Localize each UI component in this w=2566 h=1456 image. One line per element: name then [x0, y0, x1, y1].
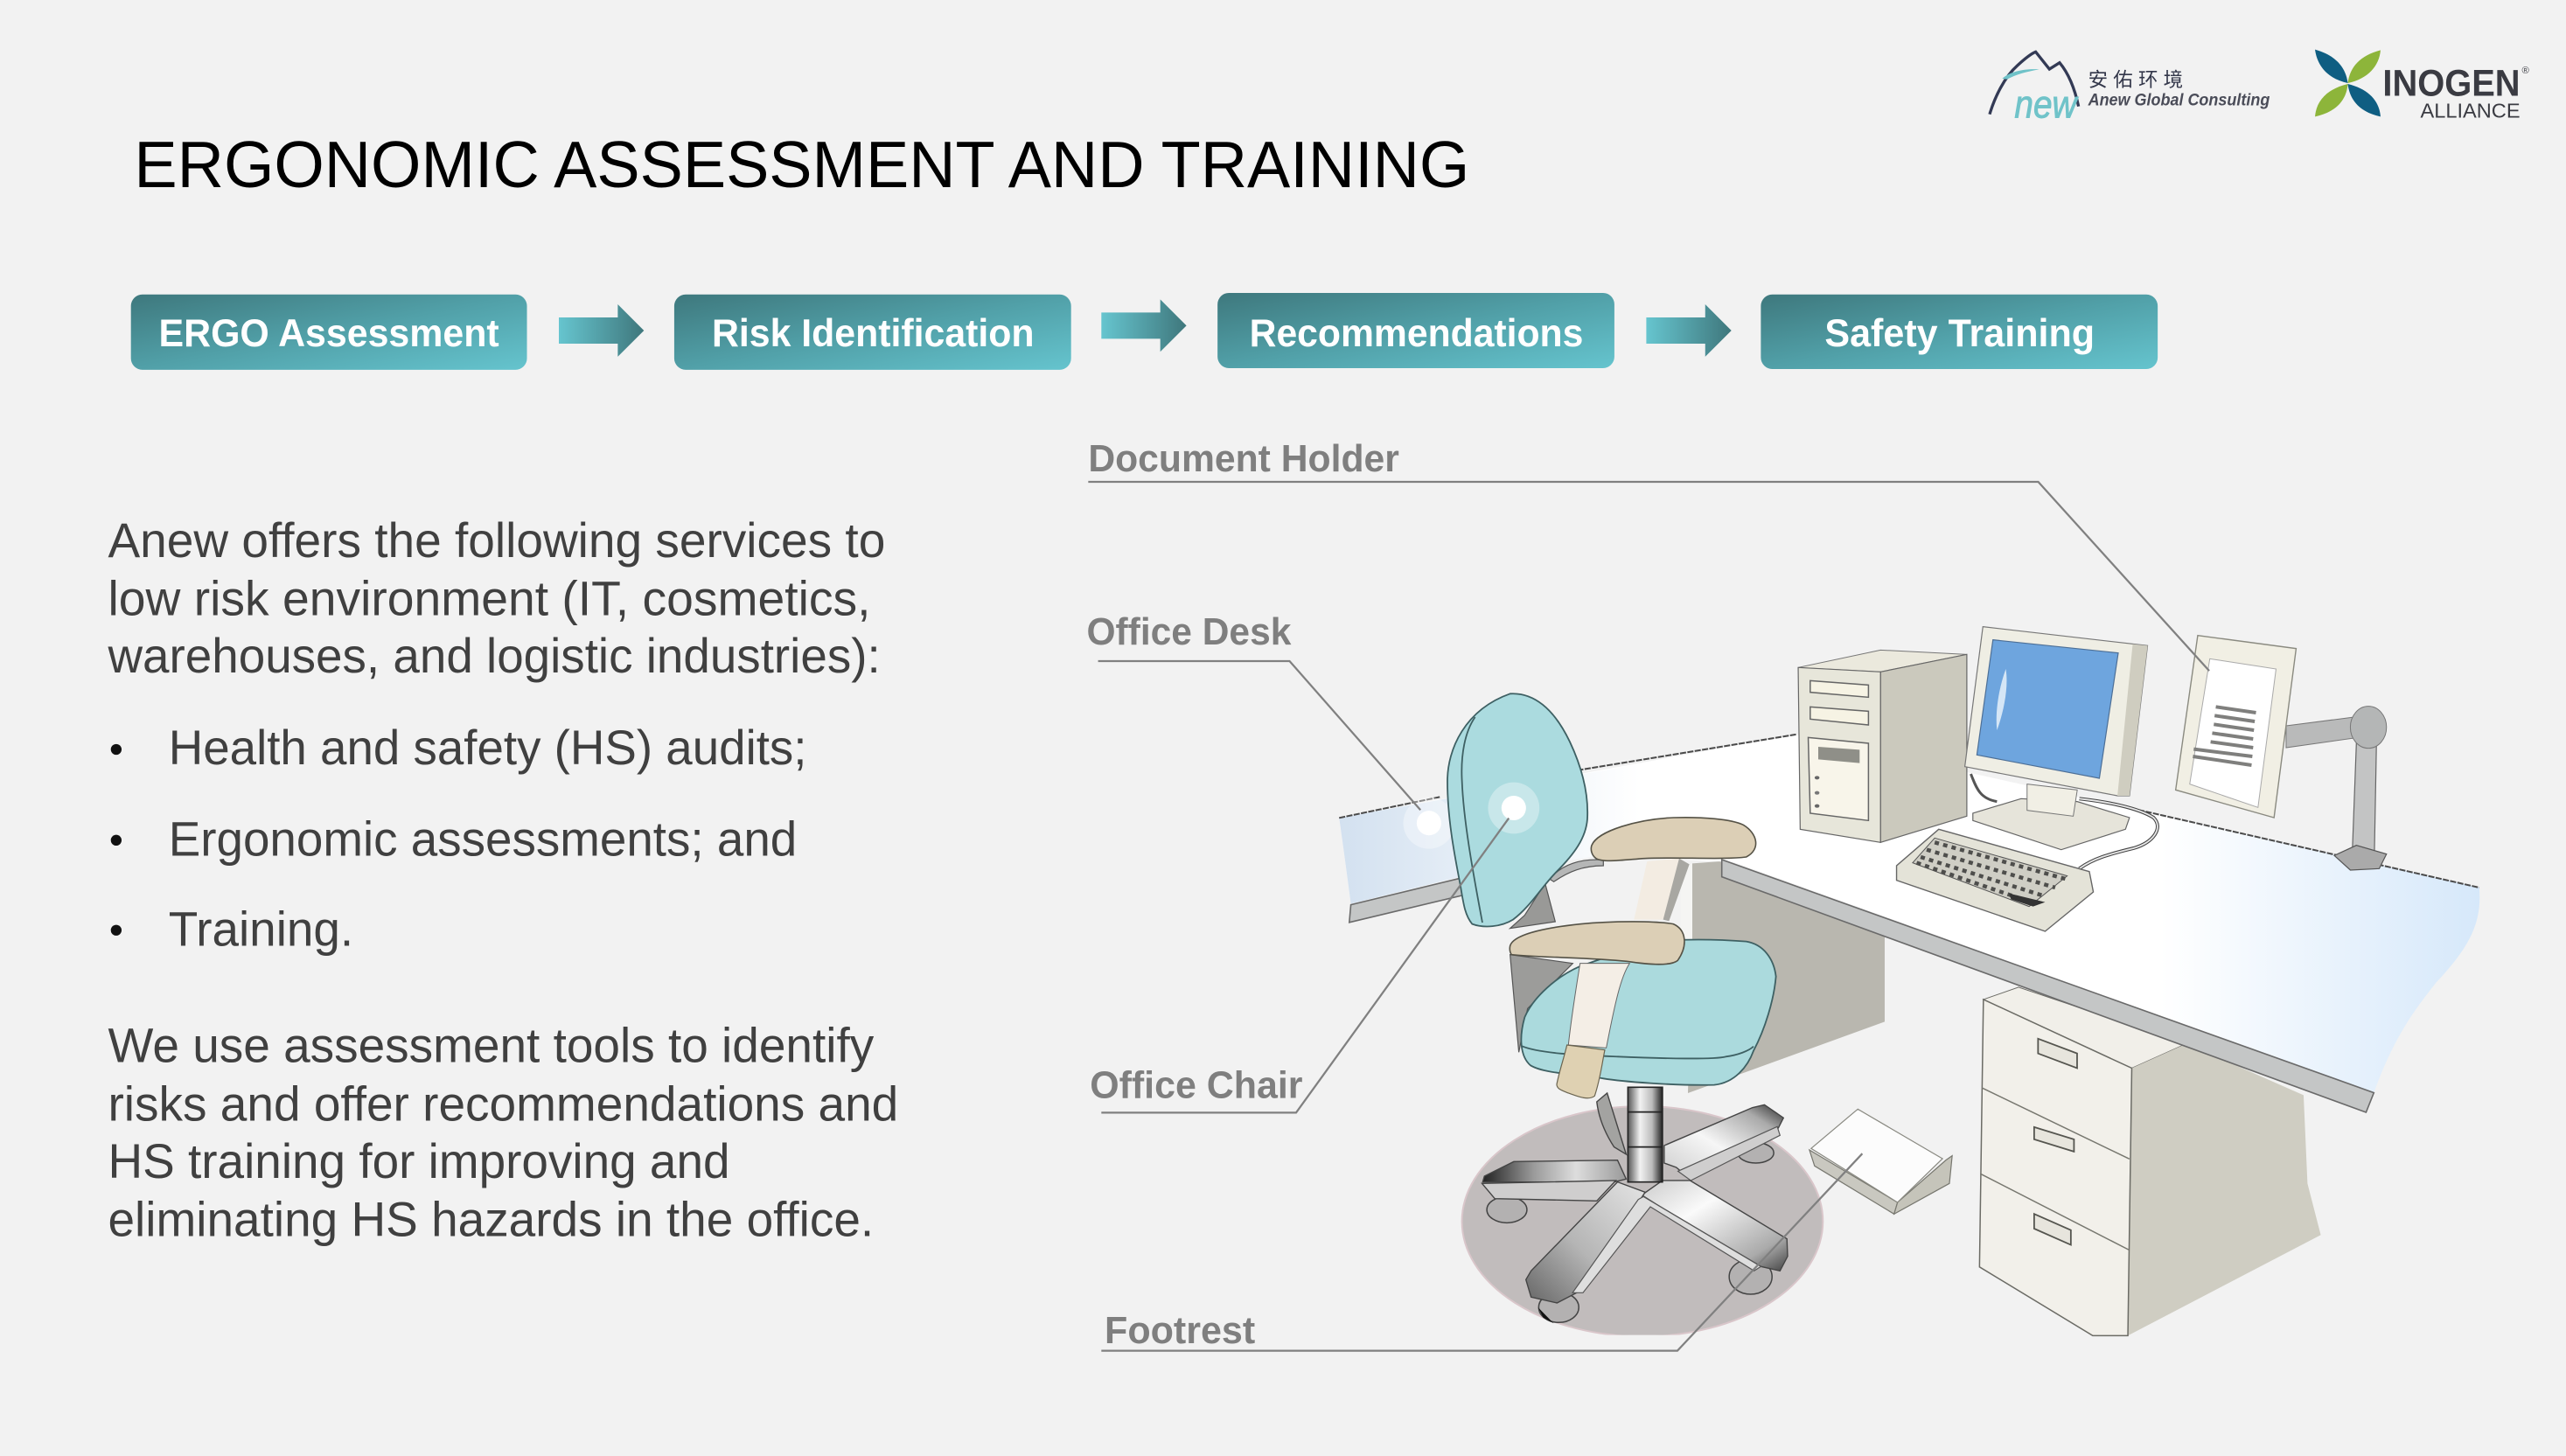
callout: Office Chair: Office Chair [1090, 1064, 1302, 1107]
step: ERGO Assessment: ERGO Assessment [159, 310, 499, 355]
office workstation illustration [1339, 627, 2479, 1336]
closing paragraph: eliminating HS hazards in the office. [108, 1193, 874, 1247]
logo: Inogen Alliance: INOGEN [2382, 62, 2521, 104]
callout: Document Holder [1088, 437, 2209, 671]
arrow 1 [559, 304, 644, 357]
computer monitor [1965, 627, 2158, 868]
filing cabinet [1979, 987, 2321, 1335]
computer tower [1798, 650, 1967, 842]
chair front armrest [1510, 922, 1684, 1098]
logo: Inogen Alliance: ALLIANCE [2420, 100, 2521, 122]
bullet list: Training. [169, 902, 353, 957]
intro text: low risk environment (IT, cosmetics, [108, 572, 870, 626]
closing paragraph: We use assessment tools to identify [108, 1018, 875, 1072]
desk pedestal [1688, 861, 1885, 1093]
logo: Anew Global Consulting [1990, 52, 2270, 127]
step: Safety Training: Safety Training [1824, 310, 2095, 355]
title: ERGONOMIC ASSESSMENT AND TRAINING [134, 128, 1469, 201]
arrow 2 [1101, 299, 1187, 352]
document holder [2176, 636, 2387, 870]
callout: Footrest [1101, 1153, 1862, 1352]
desk surface [1339, 735, 2479, 1112]
logo: Anew Global Consulting: 安佑环境 [2088, 69, 2183, 91]
closing paragraph [108, 1018, 898, 1247]
callout: Document Holder: Document Holder [1088, 437, 1399, 480]
chair back support [1510, 860, 1603, 1052]
bullet list: Ergonomic assessments; and [169, 812, 797, 867]
intro text: Anew offers the following services to [108, 513, 885, 568]
logo: Anew Global Consulting: Anew Global Consulting [2088, 91, 2270, 110]
step: Risk Identification [674, 295, 1071, 370]
logo: Inogen Alliance [2315, 50, 2529, 122]
chair seat [1521, 940, 1776, 1085]
bullet list [111, 721, 806, 957]
bullet list: Health and safety (HS) audits; [169, 721, 806, 775]
footrest [1809, 1109, 1952, 1214]
chair rear armrest [1591, 818, 1756, 921]
highlight: desk [1404, 798, 1454, 849]
step: Recommendations: Recommendations [1250, 310, 1583, 355]
callout: Office Desk: Office Desk [1086, 610, 1292, 653]
arrow 3 [1646, 304, 1732, 357]
step: Safety Training [1761, 295, 2158, 369]
office chair [1447, 693, 1788, 1323]
chair backrest [1447, 693, 1587, 926]
keyboard [1897, 829, 2094, 931]
logo: Anew Global Consulting: new [2014, 82, 2079, 127]
step: Risk Identification: Risk Identification [712, 310, 1035, 355]
logo: Inogen Alliance: ® [2521, 66, 2529, 76]
intro text [108, 513, 885, 683]
highlight: chair [1488, 783, 1539, 833]
white modesty gap [1681, 863, 1692, 938]
closing paragraph: HS training for improving and [108, 1134, 730, 1188]
floor mat [1462, 1106, 1823, 1336]
step: ERGO Assessment [131, 295, 527, 370]
computer tower, monitor, keyboard and document holder [1798, 627, 2387, 931]
intro text: warehouses, and logistic industries): [108, 629, 881, 683]
callout: Office Desk [1086, 610, 1420, 810]
callout: Footrest: Footrest [1105, 1309, 1256, 1352]
chair base [1482, 1087, 1788, 1323]
wheels [1487, 1143, 1774, 1322]
callout: Office Chair [1090, 819, 1509, 1112]
step: Recommendations [1217, 293, 1614, 368]
closing paragraph: risks and offer recommendations and [108, 1077, 898, 1132]
process flow [131, 293, 2158, 370]
